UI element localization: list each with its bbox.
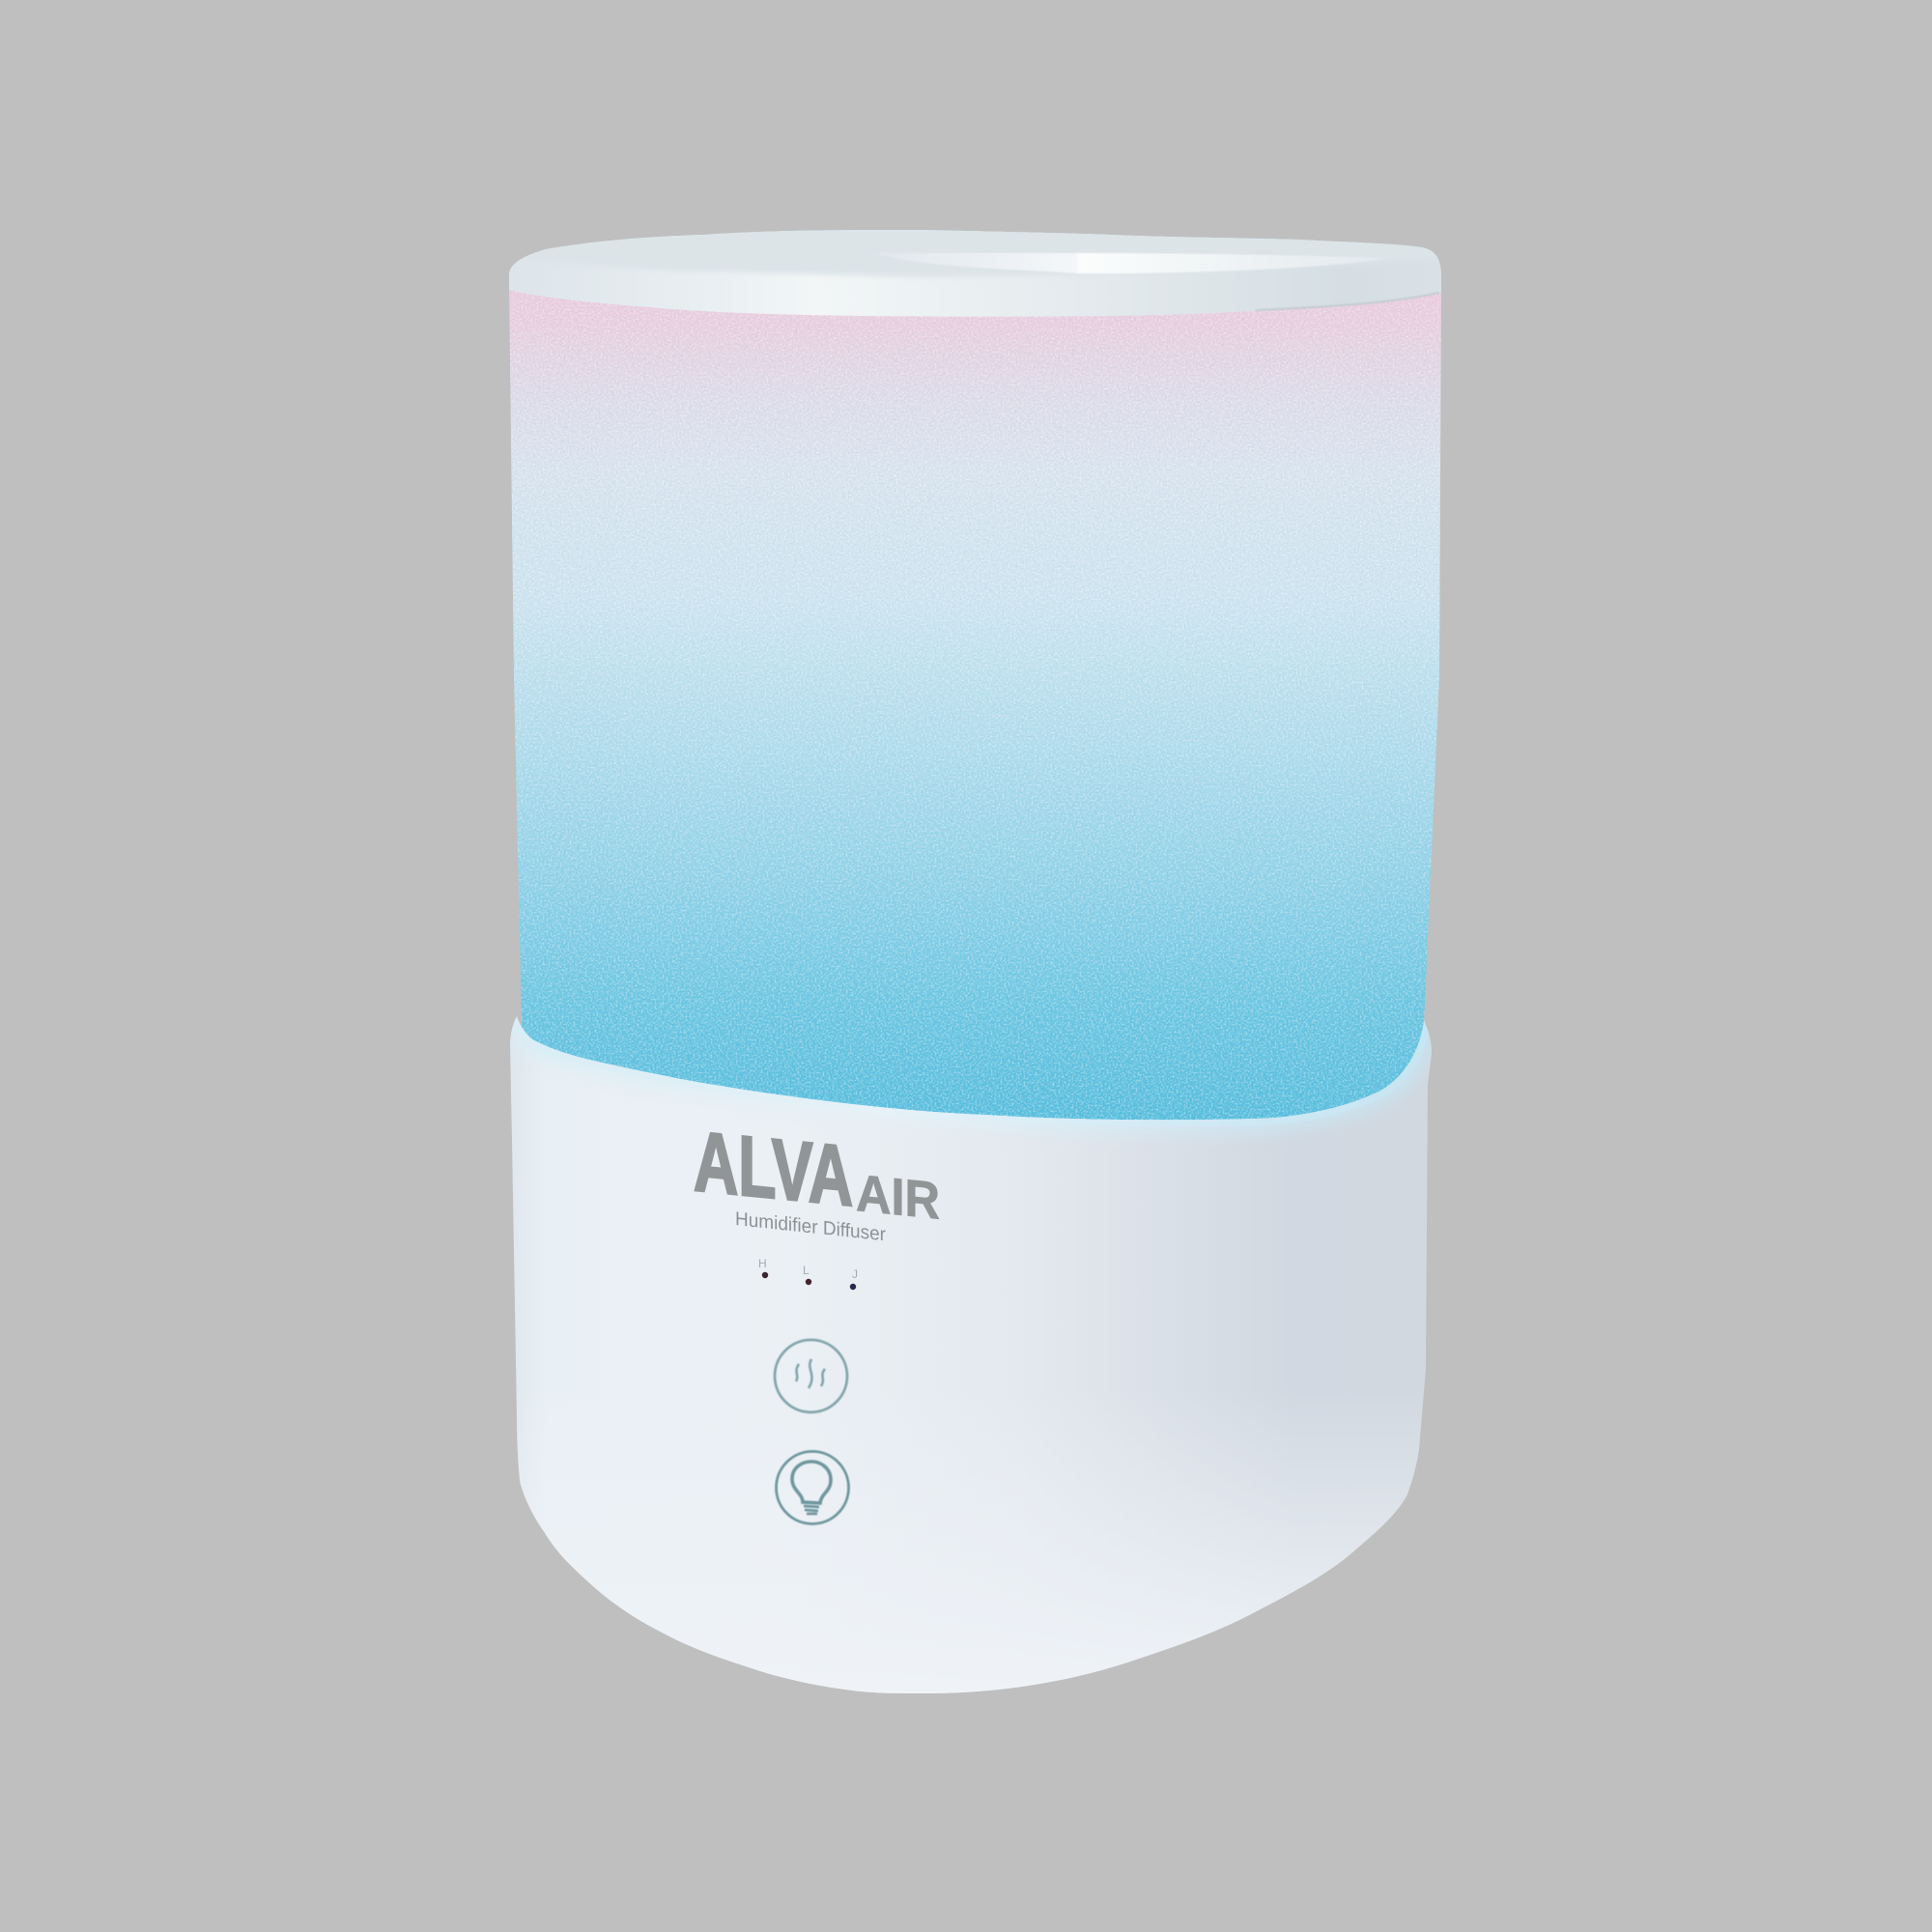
- base: [502, 1005, 1439, 1700]
- indicator labels and lights: L: [803, 1264, 810, 1277]
- icon: light bulb button: [777, 1451, 848, 1524]
- brand logo: [694, 1113, 940, 1231]
- lid band and silhouette: [509, 230, 1441, 317]
- logo word ALVA: ALVA: [694, 1113, 853, 1224]
- base rim glow: [517, 1016, 1424, 1120]
- tank: gradient translucent body: [502, 280, 1449, 1179]
- product illustration: humidifier on grey background: [509, 230, 1441, 1693]
- product name: Humidifier Diffuser: [735, 1208, 886, 1245]
- lid: [509, 230, 1441, 317]
- lid opening highlight right: [1077, 253, 1388, 273]
- lid opening highlight left: [872, 253, 1078, 273]
- lid edge shadow: [1256, 293, 1439, 310]
- lid top surface: [528, 230, 1437, 277]
- indicator labels and lights: J: [852, 1267, 858, 1281]
- logo word AIR: AIR: [856, 1164, 940, 1231]
- indicator labels and lights: H: [758, 1257, 767, 1270]
- indicator labels and lights: [758, 1257, 858, 1290]
- icon: mist button: [775, 1340, 847, 1412]
